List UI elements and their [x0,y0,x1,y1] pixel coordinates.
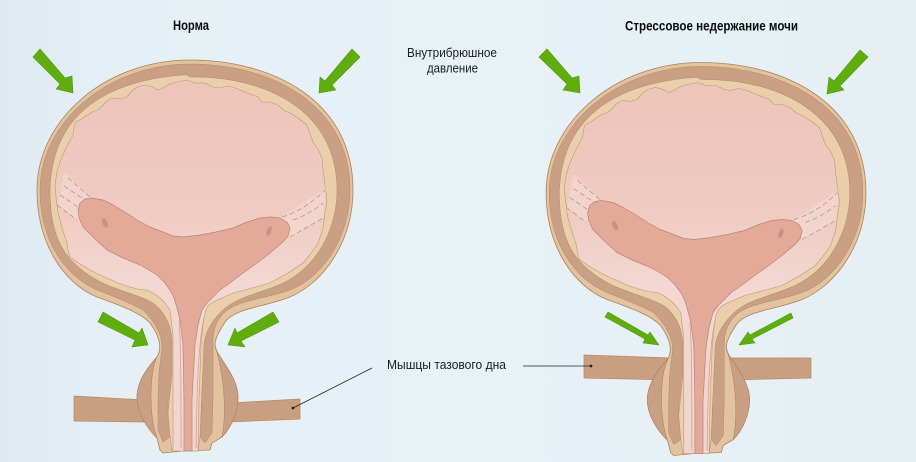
arrows: abdominal pressure and weak pelvic pressure, stress incontinence [539,49,868,345]
trigone and urethra [588,200,802,454]
ligament fibres [566,174,839,240]
figure: stress incontinence anatomy [546,62,866,456]
label: Внутрибрюшное давление: Внутрибрюшное [407,46,497,60]
sphincter bulbs [647,348,750,440]
bladder outer wall [37,60,353,453]
pelvic floor muscle, normal position [74,396,300,422]
title: Норма: Норма [173,17,209,33]
bladder muscle layer [549,66,863,446]
pelvic floor muscle, raised position [584,355,811,380]
bladder muscle layer [40,64,350,443]
sphincter bulbs [137,345,238,438]
title: Стрессовое недержание мочи: Стрессовое недержание мочи [625,18,798,34]
bladder cavity [55,80,327,451]
leader line: left pelvic floor [292,368,372,409]
cream mucosal layer [50,75,337,451]
urethra lining [179,318,204,448]
cream mucosal layer [559,78,850,454]
arrows: abdominal pressure and pelvic pressure, normal [33,49,360,347]
bladder cavity [564,82,840,454]
leader line: right pelvic floor [523,365,592,367]
ligament fibres [57,172,326,237]
ureter openings [101,217,273,236]
label: Мышцы тазового дна: Мышцы тазового дна [387,358,506,372]
trigone and urethra [78,198,290,451]
urethra lining [690,320,715,450]
ureter openings [611,220,785,239]
label: Внутрибрюшное давление [407,46,497,76]
figure: normal anatomy [37,60,353,453]
label: Внутрибрюшное давление: давление [427,62,478,76]
bladder outer wall [546,62,866,456]
